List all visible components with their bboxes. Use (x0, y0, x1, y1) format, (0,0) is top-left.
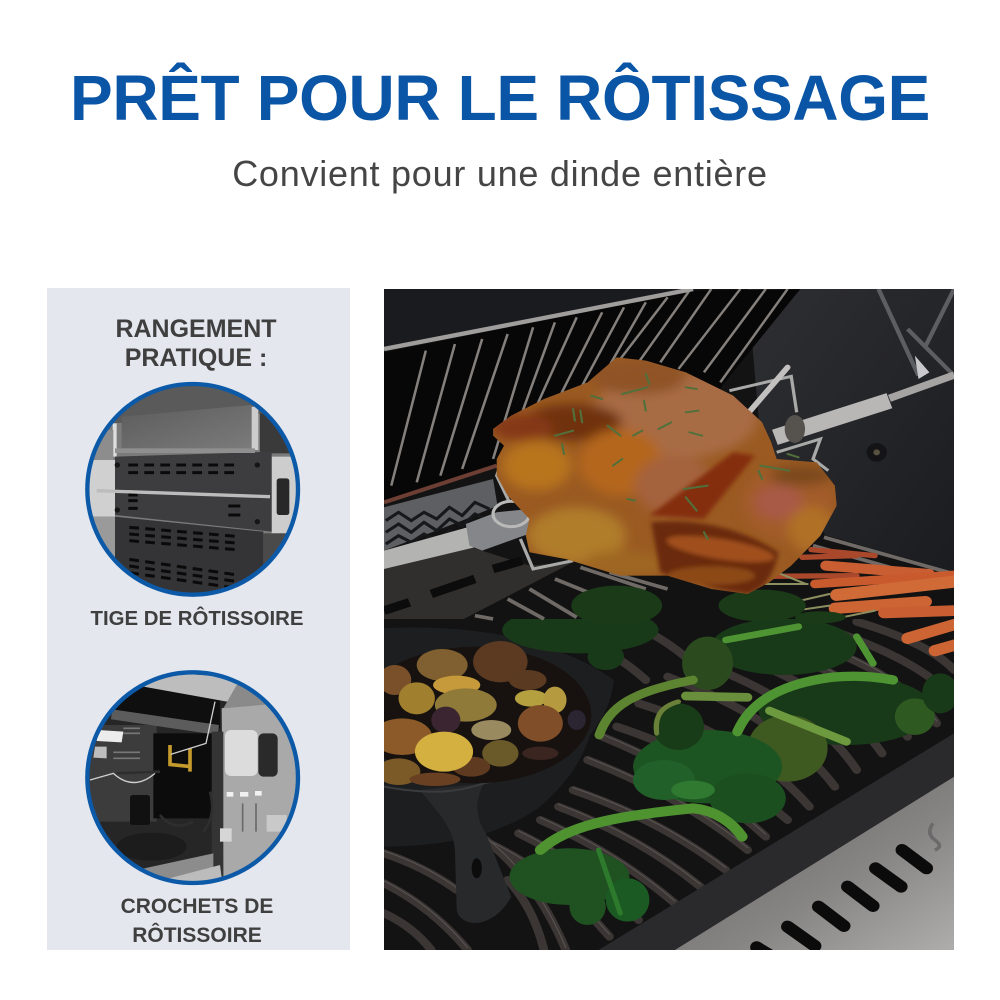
grill interior (384, 289, 954, 572)
roasted potatoes (372, 641, 586, 786)
lower grill grates (384, 620, 954, 950)
photo: rotisserie chicken on grill (384, 289, 954, 950)
panel heading: RANGEMENT (115, 315, 277, 343)
broccolini (502, 607, 958, 925)
icon: rotisserie rod photo (85, 382, 300, 597)
cast iron skillet (359, 627, 614, 923)
carrots in lower corner (908, 623, 958, 651)
subtitle: Convient pour une dinde entière (232, 153, 768, 194)
panel heading: PRATIQUE : (125, 344, 267, 372)
icon: rotisserie hooks photo (85, 670, 300, 886)
rotisserie spit and forks (384, 367, 954, 569)
label: hooks (121, 895, 273, 947)
grill front edge and vents (599, 733, 954, 955)
panel: storage (47, 288, 350, 950)
carrots (766, 550, 954, 617)
label: hooks: CROCHETS DE (121, 895, 273, 918)
chevron burner shield (384, 479, 497, 551)
top broccolini behind chicken (571, 586, 846, 626)
title: PRÊT POUR LE RÔTISSAGE (70, 62, 930, 134)
label: hooks: RÔTISSOIRE (132, 924, 262, 947)
label: rod: TIGE DE RÔTISSOIRE (90, 608, 304, 630)
panel heading (115, 315, 277, 372)
roast chicken (486, 352, 849, 599)
upper grate under chicken (384, 536, 954, 619)
